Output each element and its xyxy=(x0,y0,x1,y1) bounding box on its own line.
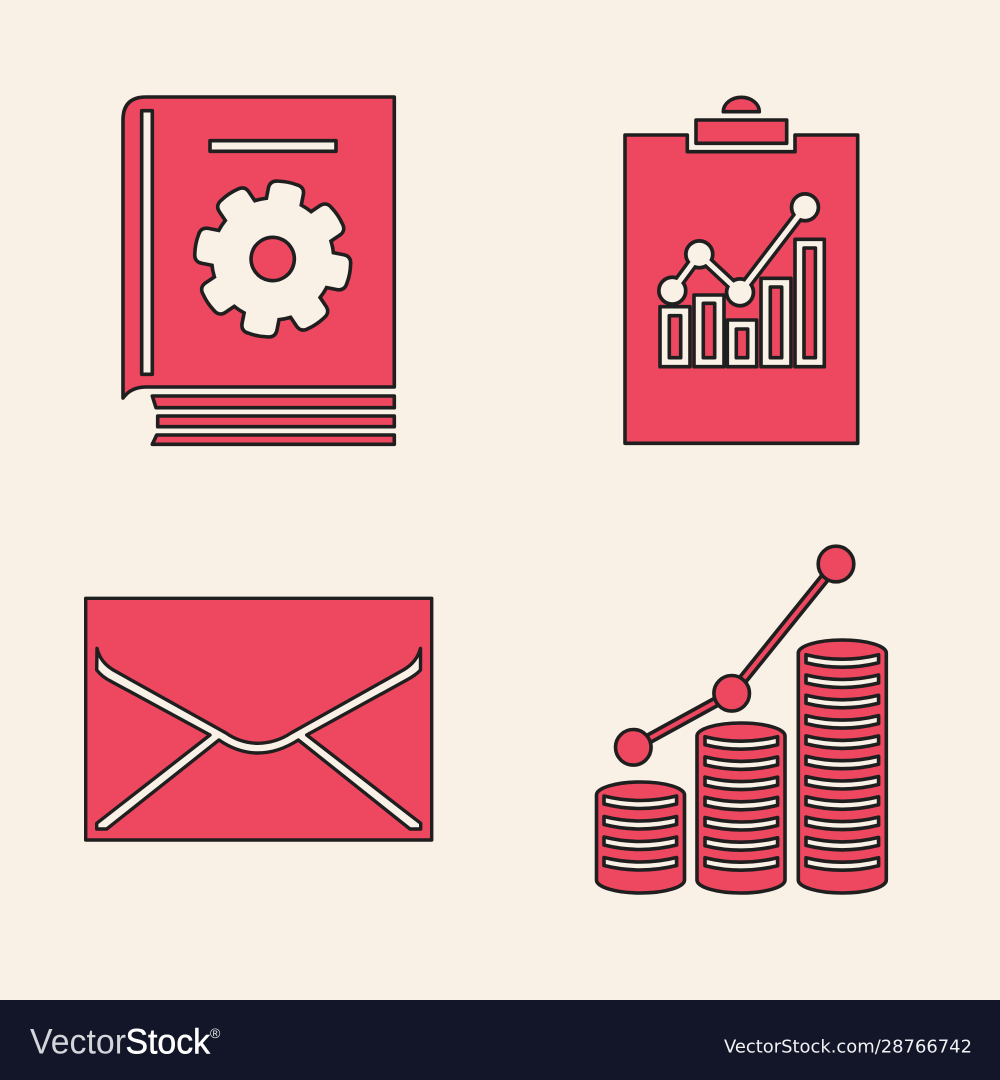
coin stack: medium xyxy=(697,723,785,893)
book title bar xyxy=(210,141,336,151)
clipboard clip xyxy=(696,120,787,143)
footer image id: VectorStock.com/28766742 xyxy=(724,1036,972,1058)
coin stack: short xyxy=(596,782,685,893)
envelope body xyxy=(86,598,432,840)
icon: envelope xyxy=(86,598,432,840)
clipboard board xyxy=(625,135,858,443)
envelope flap and seams xyxy=(97,648,421,829)
footer logo: VectorStock: Vector xyxy=(30,1022,126,1062)
icon: coin stacks with growth line xyxy=(596,546,886,893)
book pages xyxy=(152,396,394,444)
footer logo: registered mark: ® xyxy=(210,1025,221,1041)
bar chart xyxy=(660,239,824,367)
footer logo: bold part: Stock xyxy=(126,1022,210,1062)
coin stack: tall xyxy=(798,640,886,893)
book cover xyxy=(123,97,394,398)
clipboard dome xyxy=(723,97,759,112)
icon: gear xyxy=(183,169,362,349)
growth line xyxy=(616,546,854,765)
icon: book with gear xyxy=(123,97,394,444)
line chart xyxy=(659,194,818,306)
icon: clipboard with chart xyxy=(625,97,858,443)
book spine slot xyxy=(142,111,152,374)
footer bar xyxy=(0,1000,1000,1080)
